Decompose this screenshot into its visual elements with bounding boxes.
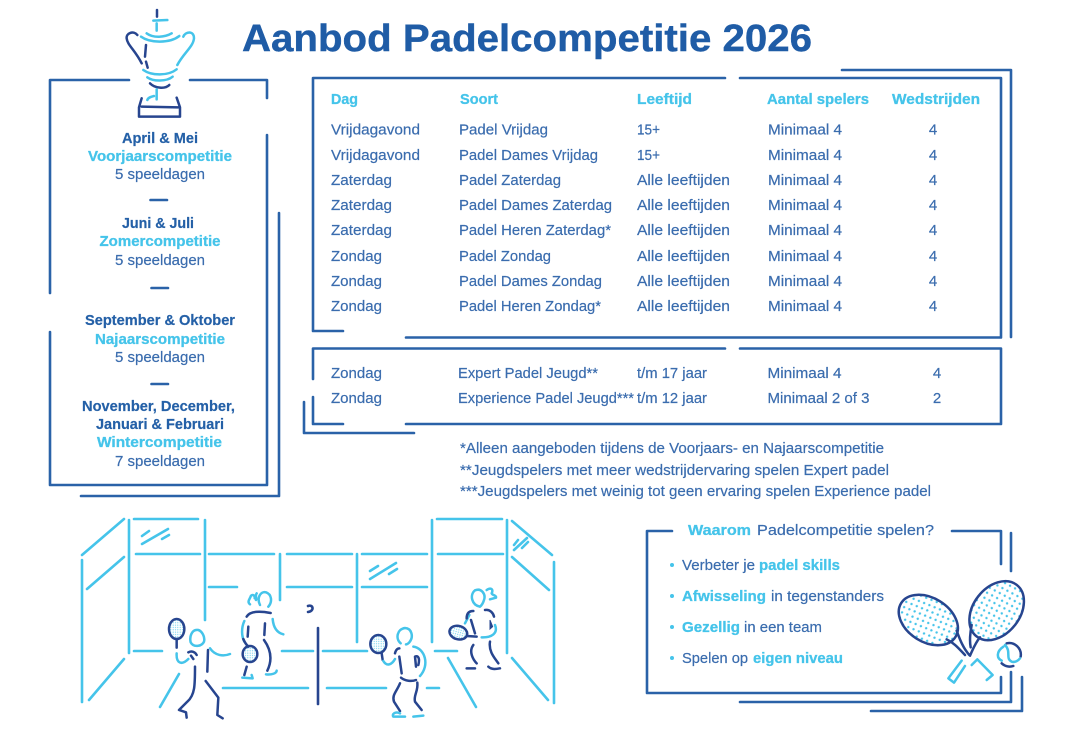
table header: Dag — [331, 91, 358, 108]
player 3 — [370, 628, 425, 717]
text block: voorjaar: 5 speeldagen — [115, 166, 205, 183]
table rows: Padel Heren Zaterdag* — [459, 222, 611, 239]
table rows: Minimaal 4 — [768, 248, 842, 265]
text block: zomer — [100, 215, 220, 269]
bullet list: Verbeter je — [682, 557, 755, 574]
table rows: Alle leeftijden — [637, 298, 730, 315]
footnotes: *Alleen aangeboden tijdens de Voorjaars- en Najaarscompetitie — [460, 440, 884, 457]
table rows: Vrijdagavond — [331, 122, 420, 138]
table rows: 4 — [929, 147, 937, 164]
jeugd frame — [304, 348, 1001, 433]
text block: zomer: Juni & Juli — [122, 215, 194, 232]
jeugd rows: Expert Padel Jeugd** — [458, 365, 598, 382]
text block: winter: November, December, — [82, 398, 235, 415]
text block: najaar: Najaarscompetitie — [95, 331, 225, 348]
text block: voorjaar: April & Mei — [122, 130, 198, 147]
table rows: Alle leeftijden — [637, 273, 730, 290]
table rows: Alle leeftijden — [637, 248, 730, 265]
table header: Leeftijd — [637, 91, 692, 108]
jeugd rows: Minimaal 2 of 3 — [768, 390, 870, 407]
panel frame: seizoenen — [50, 80, 279, 496]
table rows: Padel Vrijdag — [459, 122, 548, 138]
table rows: Minimaal 4 — [768, 222, 842, 239]
text block: voorjaar — [88, 130, 232, 183]
table rows: Padel Zondag — [459, 248, 551, 265]
table rows: 4 — [929, 122, 937, 138]
bullet list: Afwisseling — [682, 588, 766, 605]
table rows: 15+ — [637, 147, 660, 164]
table: competities — [313, 70, 1011, 338]
table rows: Minimaal 4 — [768, 197, 842, 214]
table header — [331, 91, 980, 108]
player 1 — [169, 619, 230, 718]
table rows: Minimaal 4 — [768, 147, 842, 164]
text block: winter: Januari & Februari — [96, 416, 224, 433]
waarom heading — [688, 522, 934, 539]
table rows: Zaterdag — [331, 197, 392, 214]
footnotes: **Jeugdspelers met meer wedstrijdervaring spelen Expert padel — [460, 462, 889, 479]
waarom heading: Padelcompetitie spelen? — [757, 522, 934, 539]
table rows: Alle leeftijden — [637, 197, 730, 214]
bullet list: in tegenstanders — [771, 588, 884, 605]
text block: najaar — [85, 312, 235, 366]
table rows: Padel Dames Zondag — [459, 273, 602, 290]
jeugd rows: 2 — [933, 390, 941, 407]
text block: winter: 7 speeldagen — [115, 453, 205, 470]
table header: Soort — [460, 91, 498, 108]
waarom heading: Waarom — [688, 522, 751, 539]
waarom frame — [647, 531, 1022, 711]
ball — [308, 606, 313, 612]
jeugd rows: Experience Padel Jeugd*** — [458, 390, 634, 407]
bullet list: Spelen op — [682, 650, 748, 667]
bullet list: Gezellig — [682, 619, 740, 636]
text block: winter — [82, 398, 235, 470]
text block: voorjaar: Voorjaarscompetitie — [88, 148, 232, 165]
illustration: padelbaan — [82, 519, 554, 718]
table rows: 4 — [929, 248, 937, 265]
table rows: Zondag — [331, 273, 382, 290]
jeugd rows — [331, 365, 941, 407]
table rows: 4 — [929, 222, 937, 239]
table rows: Minimaal 4 — [768, 298, 842, 315]
table: jeugd — [304, 348, 1001, 433]
player 2 — [242, 592, 283, 678]
bullet list — [670, 557, 884, 667]
table rows: 4 — [929, 273, 937, 290]
table rows: Minimaal 4 — [768, 122, 842, 138]
jeugd rows: t/m 12 jaar — [637, 390, 707, 407]
table rows: Zaterdag — [331, 172, 392, 189]
table rows: Zondag — [331, 298, 382, 315]
text block: winter: Wintercompetitie — [97, 434, 222, 451]
table rows: Vrijdagavond — [331, 147, 420, 164]
player 4 — [448, 589, 500, 669]
icon: rackets and ball — [890, 571, 1035, 683]
text block: zomer: 5 speeldagen — [115, 252, 205, 269]
table rows: Padel Dames Zaterdag — [459, 197, 612, 214]
bullet list: eigen niveau — [753, 650, 843, 667]
table rows: Minimaal 4 — [768, 172, 842, 189]
table rows: 4 — [929, 298, 937, 315]
net — [317, 628, 319, 704]
table rows — [331, 122, 937, 315]
text block: zomer: Zomercompetitie — [100, 233, 220, 250]
jeugd rows: Zondag — [331, 390, 382, 407]
bullet list: padel skills — [759, 557, 840, 574]
table rows: 4 — [929, 172, 937, 189]
jeugd rows: 4 — [933, 365, 941, 382]
panel: waarom — [647, 522, 1035, 711]
jeugd rows: Zondag — [331, 365, 382, 382]
table rows: Padel Heren Zondag* — [459, 298, 601, 315]
panel: seizoenen — [50, 80, 279, 496]
table rows: Minimaal 4 — [768, 273, 842, 290]
title: Aanbod Padelcompetitie 2026 — [242, 18, 812, 60]
text block: najaar: 5 speeldagen — [115, 349, 205, 366]
table rows: Padel Dames Vrijdag — [459, 147, 598, 164]
jeugd rows: Minimaal 4 — [768, 365, 842, 382]
text block: najaar: September & Oktober — [85, 312, 235, 329]
bullet list: in een team — [744, 619, 822, 636]
icon: trophy — [127, 10, 194, 117]
table frame — [313, 70, 1011, 338]
jeugd rows: t/m 17 jaar — [637, 365, 707, 382]
table rows: 4 — [929, 197, 937, 214]
table rows: Zaterdag — [331, 222, 392, 239]
table header: Wedstrijden — [892, 91, 980, 108]
table rows: Alle leeftijden — [637, 222, 730, 239]
footnotes — [460, 440, 931, 500]
table rows: Padel Zaterdag — [459, 172, 561, 189]
court lines — [82, 519, 554, 707]
table rows: 15+ — [637, 122, 660, 138]
table header: Aantal spelers — [767, 91, 869, 108]
table rows: Zondag — [331, 248, 382, 265]
table rows: Alle leeftijden — [637, 172, 730, 189]
footnotes: ***Jeugdspelers met weinig tot geen ervaring spelen Experience padel — [460, 483, 931, 500]
